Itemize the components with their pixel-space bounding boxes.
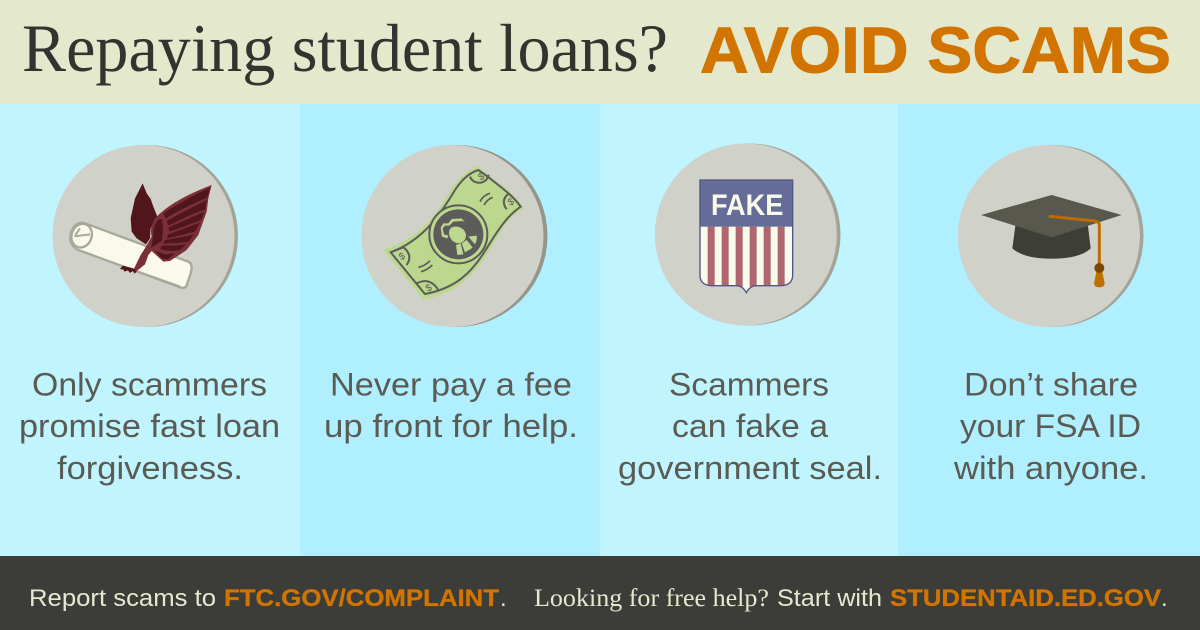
- text: only scammers: [19, 366, 280, 486]
- footer band: [0, 556, 1200, 630]
- panel: column 3 background: [600, 104, 898, 556]
- text: scammers can fake a seal: Scammers: [669, 366, 829, 402]
- text: never pay a fee: [324, 366, 578, 444]
- icon: dollar bill: $: [476, 171, 487, 183]
- footer: free help: Looking for free help?: [534, 585, 769, 612]
- text: don't share FSA ID: Don’t share: [964, 366, 1138, 402]
- text: don't share FSA ID: your FSA ID: [960, 408, 1141, 444]
- text: don't share FSA ID: with anyone.: [953, 450, 1148, 486]
- footer: report scams: Report scams to: [29, 585, 216, 612]
- text: scammers can fake a seal: can fake a: [672, 408, 828, 444]
- text: never pay a fee: Never pay a fee: [330, 366, 572, 402]
- panel: column 2 background: [300, 104, 600, 556]
- footer: free help: STUDENTAID.ED.GOV: [890, 585, 1161, 612]
- title: avoid scams: AVOID SCAMS: [700, 14, 1171, 87]
- icon: graduation cap: [958, 145, 1144, 327]
- text: don't share FSA ID: [953, 366, 1148, 486]
- icon: dollar bill: [362, 145, 548, 327]
- icon: dollar bill: $: [424, 282, 435, 295]
- footer: free help: .: [1161, 585, 1168, 612]
- text: never pay a fee: up front for help.: [324, 408, 578, 444]
- icon: scroll with winged bird: [52, 145, 238, 327]
- icon: fake government shield: [655, 144, 840, 326]
- header band: [0, 0, 1200, 104]
- title: repaying student loans: Repaying student loans?: [22, 10, 668, 86]
- icon: fake government shield: FAKE: [711, 189, 783, 222]
- footer: report scams: FTC.GOV/COMPLAINT: [224, 585, 499, 612]
- text: only scammers: Only scammers: [32, 366, 267, 402]
- panel: column 4 background: [898, 104, 1200, 556]
- text: only scammers: forgiveness.: [57, 450, 243, 486]
- footer: report scams: .: [500, 585, 507, 612]
- footer: free help: [534, 585, 1168, 612]
- panel: column 1 background: [0, 104, 300, 556]
- icon: dollar bill: $: [506, 196, 517, 209]
- footer: report scams: [29, 585, 507, 612]
- text: only scammers: promise fast loan: [19, 408, 280, 444]
- icon: dollar bill: $: [397, 251, 408, 263]
- text: scammers can fake a seal: government seal.: [618, 450, 882, 486]
- footer: free help: Start with: [777, 585, 882, 612]
- text: scammers can fake a seal: [618, 366, 882, 486]
